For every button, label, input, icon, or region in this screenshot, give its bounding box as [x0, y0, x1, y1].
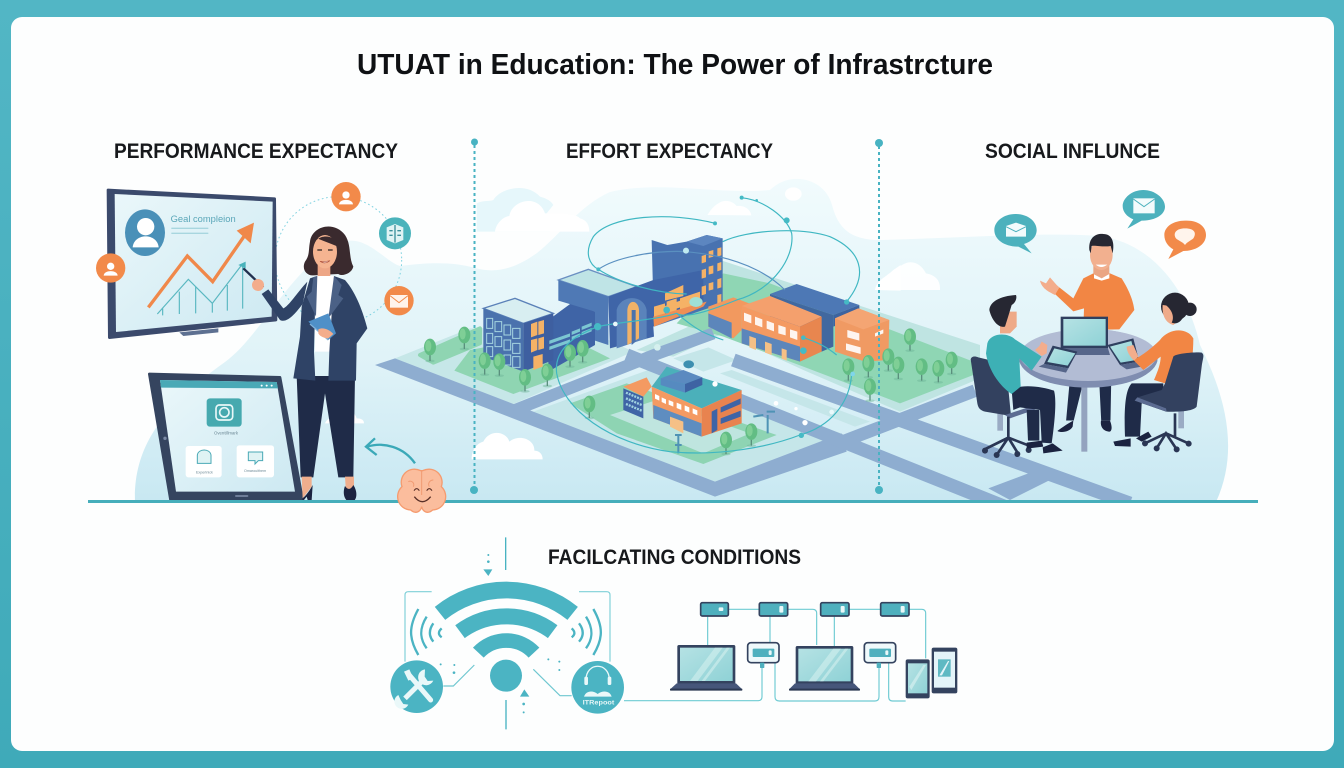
laptop left — [670, 645, 742, 691]
connector lines — [443, 665, 572, 696]
trees — [424, 327, 958, 455]
round table — [1019, 329, 1158, 452]
cloud — [897, 262, 940, 290]
shirt — [315, 276, 335, 352]
icon: IT support headset — [571, 661, 624, 714]
icon: teal book — [379, 217, 411, 249]
tablet: Omarouithem — [244, 469, 266, 473]
icon: envelope — [384, 286, 414, 315]
monitor — [108, 190, 276, 338]
arrows in and out — [483, 554, 529, 713]
building: blue left wing — [483, 298, 595, 372]
network nodes — [594, 196, 855, 438]
jacket — [293, 276, 367, 381]
laptops on table — [1039, 317, 1142, 373]
panel: wifi and support — [390, 537, 624, 729]
dotted divider right — [875, 139, 883, 494]
standing man — [1040, 234, 1134, 432]
network cables — [624, 609, 926, 701]
seated man left — [971, 295, 1063, 458]
heading: facilitating conditions: FACILCATING CONDITIONS — [548, 546, 801, 569]
speech bubble teal right — [1123, 190, 1165, 229]
dotted divider left — [470, 138, 478, 494]
building: main hall and tower — [558, 235, 723, 348]
network links — [556, 198, 860, 453]
speech bubble orange — [1164, 221, 1206, 259]
icon: smiling brain — [398, 469, 446, 512]
monitor label: Geal compleion — [171, 214, 236, 224]
router left — [748, 643, 779, 668]
tablet card right — [237, 445, 274, 477]
tablet device — [932, 648, 957, 693]
pale blue landscape backdrop — [135, 179, 1228, 502]
tablet: Oventillmark — [214, 431, 239, 436]
ground plates — [395, 260, 980, 482]
heading: effort expectancy: EFFORT EXPECTANCY — [566, 140, 773, 163]
tablet: Experinick — [196, 470, 213, 474]
network switches row — [701, 603, 909, 616]
arrow — [366, 438, 415, 463]
icon: orange user top — [331, 182, 361, 211]
sparks — [440, 658, 560, 674]
icon: tools — [390, 660, 443, 713]
small cloud — [325, 411, 364, 423]
speech bubble teal left — [994, 214, 1037, 253]
laptop right — [789, 646, 860, 691]
router right — [864, 643, 896, 668]
phone — [906, 659, 930, 698]
lamp posts — [675, 412, 775, 453]
icon: IT support headset: ITRepoot — [583, 699, 615, 706]
pointer — [243, 268, 263, 287]
panel: performance expectancy — [96, 182, 415, 503]
baseline — [88, 500, 1258, 503]
tablet card left — [186, 446, 222, 477]
folder — [308, 313, 336, 340]
panel: social influence — [897, 190, 1206, 458]
building: front campus block — [623, 360, 742, 437]
heading: social influence: SOCIAL INFLUNCE — [985, 140, 1160, 163]
icon: orange user left — [96, 253, 125, 283]
app tile — [207, 398, 242, 427]
panel: device network — [624, 603, 957, 701]
trousers — [297, 376, 355, 477]
presenter — [238, 227, 367, 503]
dashed orbit — [275, 197, 402, 323]
panel: effort expectancy campus — [375, 187, 1130, 517]
avatar — [125, 209, 165, 256]
teal line chart — [157, 265, 243, 315]
icon: wifi symbol — [411, 590, 601, 692]
roads — [375, 333, 1130, 517]
clouds — [472, 187, 901, 459]
title: UTUAT in Education: The Power of Infrastrcture — [357, 49, 993, 81]
building: right orange blocks — [708, 284, 889, 362]
seated woman right — [1113, 293, 1203, 452]
hair back — [304, 227, 353, 275]
heading: performance expectancy: PERFORMANCE EXPECTANCY — [114, 140, 398, 163]
orange arrow chart — [148, 235, 245, 307]
bracket lines and guides — [405, 592, 610, 662]
tablet — [149, 374, 303, 501]
